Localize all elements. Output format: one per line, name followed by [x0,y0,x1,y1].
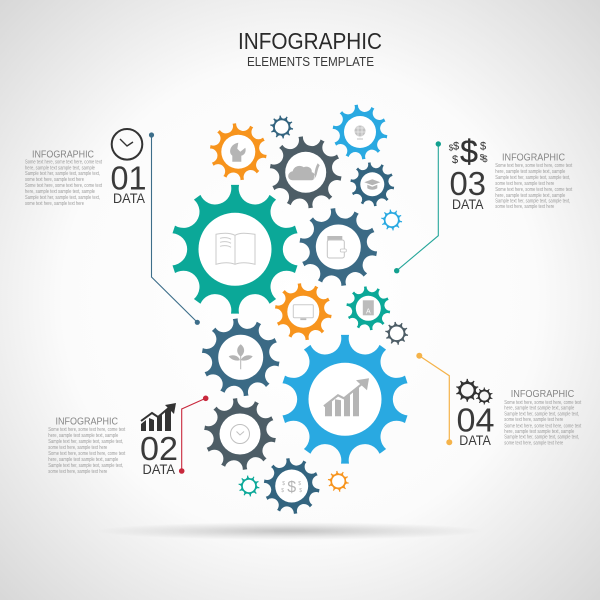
icon: globe [354,126,366,139]
gear: dark blue plant [198,313,284,401]
text block 02: Sample text her, sample text, sample text, [48,463,123,469]
icon: dollars [281,479,302,496]
number 01: 01 [110,160,146,196]
gear: teal book [172,185,298,314]
text block 04: Sample text her, sample text, sample text, [504,411,579,417]
icon: dollars: $ [287,479,296,496]
text block 03: Some text here, some text here, come text [495,163,573,169]
text block 04: Some text here, some text here, come text [504,423,582,429]
icon: dollars: $ [299,488,302,494]
text block 02: Sample text her, sample text, sample text, [48,439,123,445]
icon: dollar signs 03: $ [482,154,488,164]
gear: dark blue graduation cap [348,160,396,209]
icon: dollar signs 03: $ [452,154,458,166]
icon: dollar signs 03: $ [453,140,459,152]
icon: dollars: $ [281,488,284,494]
icon: dollar signs 03 [449,134,488,170]
text block 04: here, sample text sample text, sample [504,429,574,435]
icon: plant [229,344,253,369]
connector 01 [149,132,200,325]
text block 01: Sample text her, sample text, sample text, [25,195,100,201]
text block 04: some text here, sample text here [504,440,563,446]
text block 04: here, sample text sample text, sample [504,406,574,412]
text block 03: some text here, sample text here [495,204,554,210]
gear: small orange bottom [327,470,350,493]
text block 04: Sample text her, sample text, sample text, [504,434,579,440]
icon: cloud [288,163,320,180]
text block 01 [25,148,102,207]
gear: orange wrench [207,120,270,184]
number 02: 02 [140,430,178,467]
connector 02 [179,396,208,474]
icon: wrench [230,143,246,162]
text block 03: here, sample text sample text, sample [495,193,565,199]
icon: clock 01 [112,129,142,160]
icon: dollar signs 03: $ [480,153,485,162]
text block 03: some text here, sample text here [495,181,554,187]
text block 02 [48,416,126,475]
icon: dollars: $ [282,481,285,487]
connector 04 [416,353,452,445]
label DATA 02: DATA [142,462,175,477]
icon: graduation cap [364,179,380,190]
gear: orange monitor [272,280,335,344]
text block 02: INFOGRAPHIC [56,416,118,428]
text block 02: Some text here, some text here, come text [48,451,126,457]
icon: letter book: A [366,308,371,315]
icon: monitor [293,305,313,319]
text block 01: INFOGRAPHIC [32,148,94,160]
icon: rising bar chart [324,378,369,416]
icon: dollar signs 03: $ [460,134,478,170]
text block 03: Sample text her, sample text, sample text, [495,198,570,204]
icon: two gears 04 [456,379,493,404]
gear: teal letter book [344,284,392,333]
gear: dark blue dollar [261,455,322,517]
gear: small dark right [384,320,409,346]
icon: wallet [327,236,346,258]
icon: open book [216,233,255,264]
icon: dollar signs 03: $ [480,140,486,152]
icon: clock [230,424,250,444]
text block 03: Some text here, some text here, come text [495,187,573,193]
text block 02: some text here, sample text here [48,445,107,451]
text block 01: here, sample text sample text, sample [25,166,95,172]
gear: small dark blue top [269,114,294,140]
gear: dark cloud [266,132,345,213]
text block 03 [495,152,573,210]
title: ELEMENTS TEMPLATE [247,54,374,69]
text block 01: Some text here, some text here, come text [25,183,102,189]
connector 03 [394,141,441,273]
text block 03: INFOGRAPHIC [502,152,565,164]
text block 03: here, sample text sample text, sample [495,169,565,175]
gear: blue globe [330,101,390,163]
gear: small blue [380,208,403,232]
text block 02: here, sample text sample text, sample [48,433,118,439]
title [238,28,382,69]
text block 01: Some text here, some text here, come text [25,160,102,166]
title: INFOGRAPHIC [238,28,382,54]
gear: small teal bottom [237,474,261,498]
icon: dollar signs 03: $ [449,144,454,152]
text block 03: Sample text her, sample text, sample text, [495,175,570,181]
text block 01: some text here, sample text here [25,177,84,183]
gear: big blue chart [282,335,408,464]
gear: dark clock [200,394,280,474]
text block 02: some text here, sample text here [48,469,107,475]
floor shadow [95,522,485,540]
label DATA 01: DATA [113,191,145,206]
text block 01: here, sample text sample text, sample [25,189,95,195]
icon: dollars: $ [298,481,301,487]
label DATA 03: DATA [452,197,484,212]
gear: dark blue wallet [295,203,381,291]
label DATA 04: DATA [459,433,491,448]
text block 02: Some text here, some text here, come text [48,427,126,433]
text block 01: Sample text her, sample text, sample text, [25,171,100,177]
text block 04: some text here, sample text here [504,417,563,423]
number 03: 03 [450,165,486,202]
text block 04: INFOGRAPHIC [511,388,575,400]
text block 04 [504,388,582,446]
text block 02: here, sample text sample text, sample [48,457,118,463]
text block 04: Some text here, some text here, come text [504,400,582,406]
number 04: 04 [456,402,494,439]
text block 01: some text here, sample text here [25,201,84,207]
icon: growth chart 02 [141,403,176,431]
